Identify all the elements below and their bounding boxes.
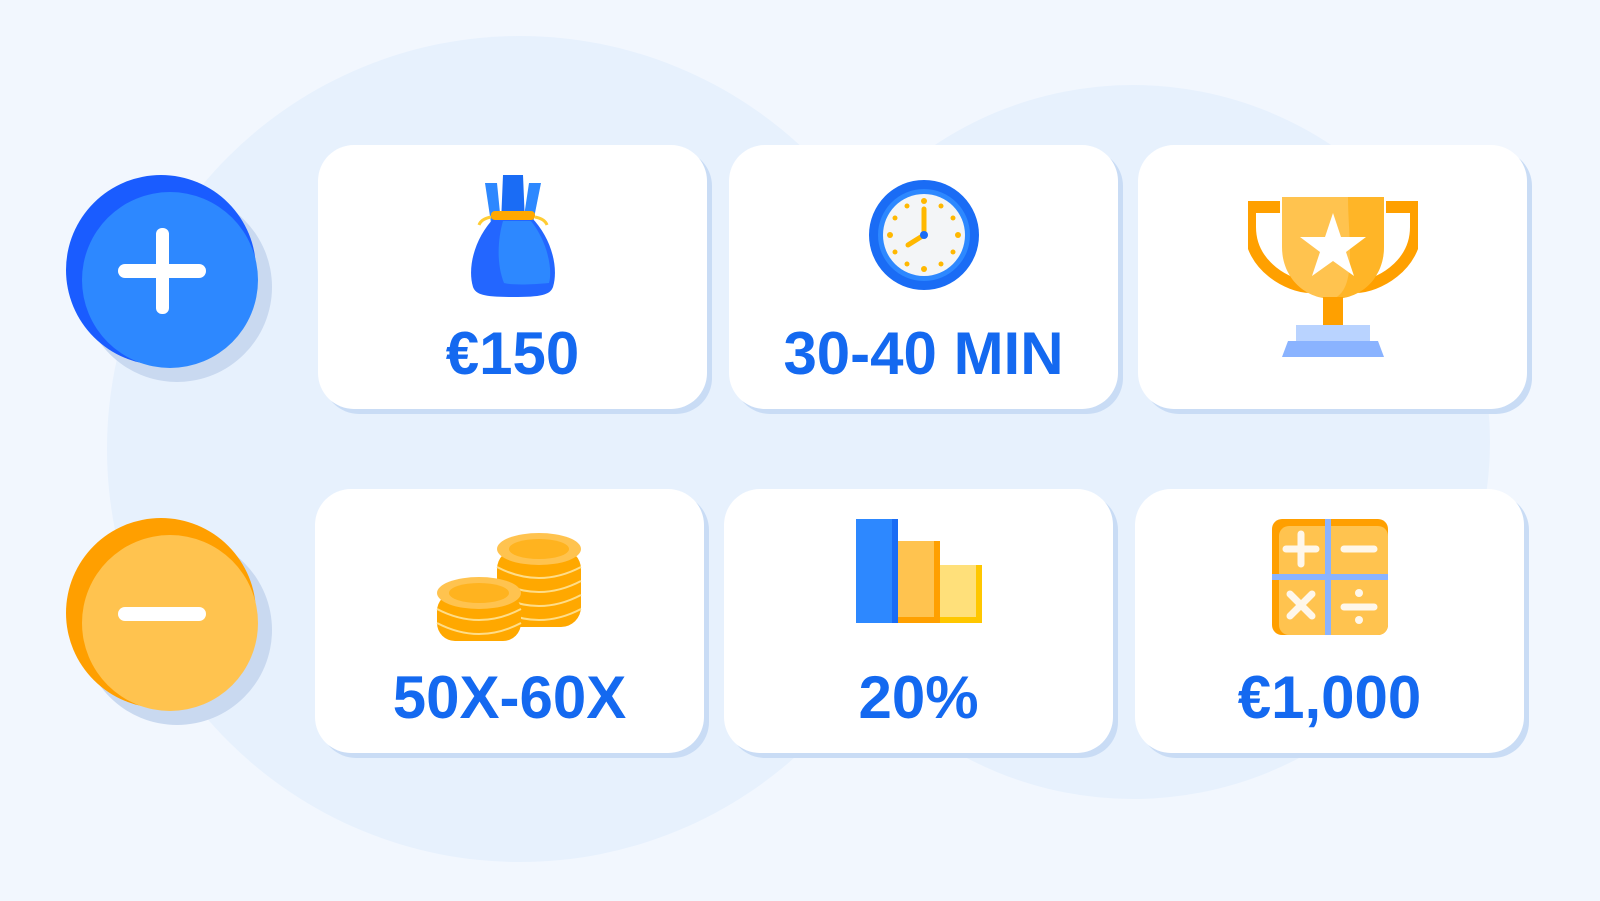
card: money bag [318,145,707,409]
card: bar chart [724,489,1113,753]
icon: money bag [471,175,555,297]
card: trophy [1138,145,1527,409]
value: €1,000 [1238,664,1421,731]
icon: coin stacks [436,533,582,641]
card: calculator [1135,489,1524,753]
icon: clock [869,180,979,290]
value: 30-40 MIN [783,320,1064,387]
icon: calculator [1272,519,1388,635]
value: 20% [858,664,979,731]
card: coins [315,489,704,753]
plus badge [66,175,272,382]
icon: trophy [1248,197,1418,357]
value: 50X-60X [393,664,626,731]
value: €150 [446,320,579,387]
minus badge [66,518,272,725]
card: clock [729,145,1118,409]
icon: bar chart [856,519,982,623]
